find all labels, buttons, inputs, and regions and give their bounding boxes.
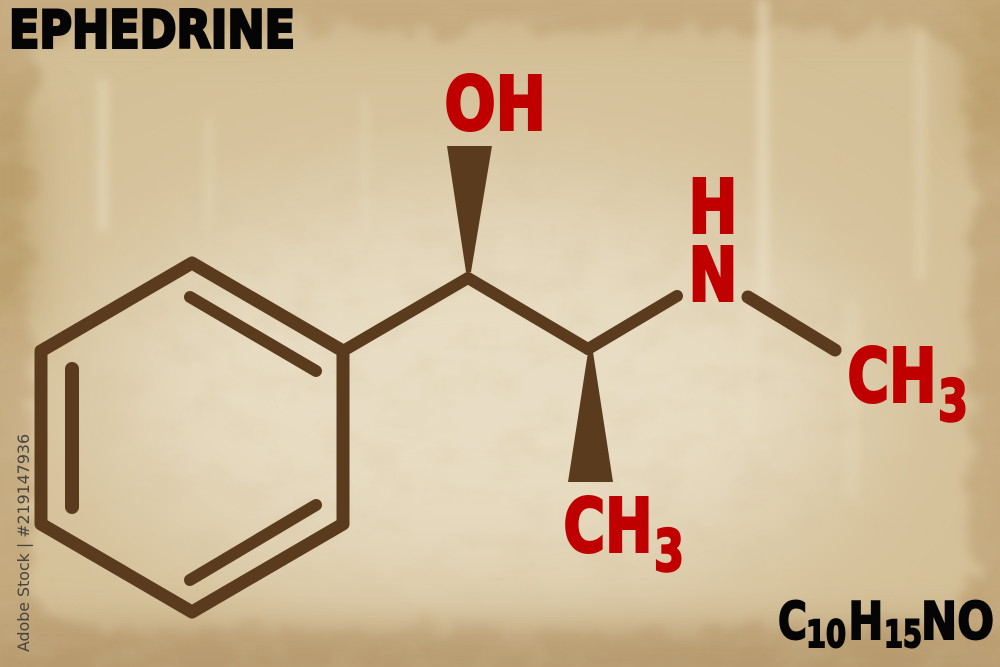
wedge bond to OH xyxy=(447,146,492,272)
bond N to methyl xyxy=(748,297,835,350)
ring double bond bottom xyxy=(190,505,316,580)
chemical formula: C xyxy=(778,592,807,652)
label N: N xyxy=(688,232,738,318)
molecule skeleton xyxy=(41,263,835,612)
label CH3 bottom: 3 xyxy=(654,518,684,584)
title: EPHEDRINE xyxy=(9,0,295,60)
bond ring to carbon xyxy=(343,278,468,351)
label OH: OH xyxy=(444,62,546,148)
chemical formula: 10 xyxy=(806,613,846,656)
label CH3 bottom: CH xyxy=(564,484,652,570)
wedge bond to CH3 xyxy=(568,352,613,482)
stock credit: Adobe Stock | #219147936 xyxy=(14,434,33,652)
label CH3 right: CH xyxy=(848,334,936,420)
ring double bond top xyxy=(190,297,316,371)
ring double bond left xyxy=(65,369,79,507)
chemical formula: 15 xyxy=(884,613,922,656)
bond carbon to NH xyxy=(588,296,677,349)
chemical formula xyxy=(778,592,994,656)
label H: H xyxy=(688,164,738,250)
bond carbon to carbon xyxy=(468,278,588,349)
benzene ring xyxy=(41,263,343,612)
chemical formula: H xyxy=(848,592,883,652)
label CH3 right: 3 xyxy=(938,368,968,434)
